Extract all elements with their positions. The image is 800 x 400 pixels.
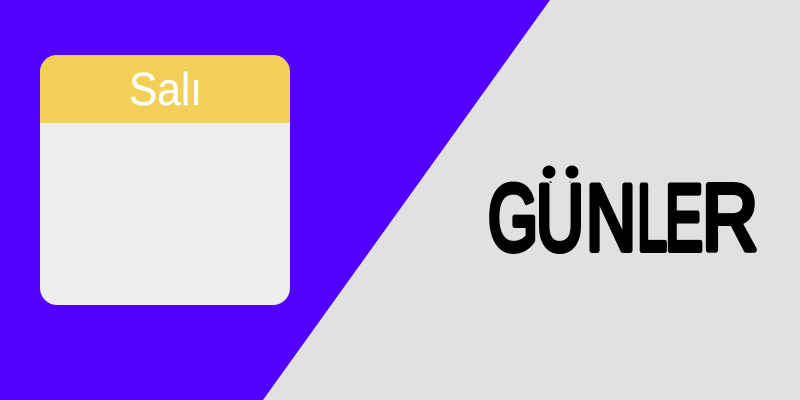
umlaut dots <box>542 166 578 178</box>
title: GÜNLER: E <box>665 165 703 270</box>
title: GÜNLER: G <box>488 165 538 270</box>
card header: yellow band <box>40 55 290 123</box>
calendar card <box>40 55 290 305</box>
title: GÜNLER <box>488 160 758 270</box>
title: GÜNLER: Ü <box>536 165 584 270</box>
title: GÜNLER: N <box>586 165 636 270</box>
background: purple diagonal panel <box>0 0 550 400</box>
card body <box>40 55 290 305</box>
title: GÜNLER: L <box>637 165 667 270</box>
day label: Salı <box>129 63 202 115</box>
title: GÜNLER: R <box>702 165 758 270</box>
